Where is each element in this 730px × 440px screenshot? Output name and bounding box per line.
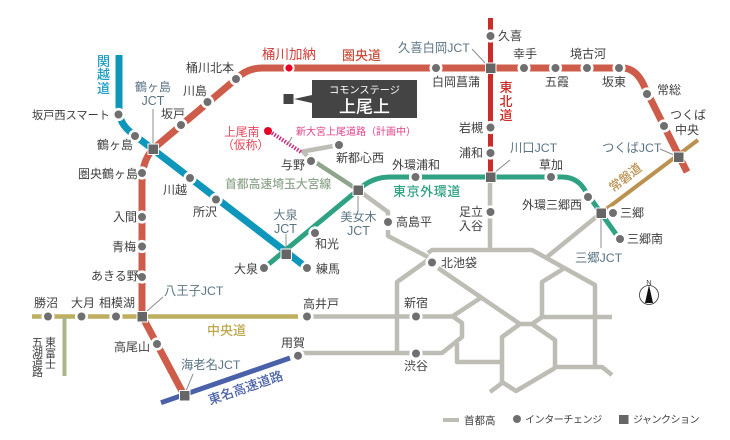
- interchange labels: 浦和: [459, 146, 483, 160]
- junction labels: つくばJCT: [602, 141, 662, 155]
- interchange labels: 久喜: [498, 29, 522, 43]
- interchange labels: 新宿: [404, 296, 428, 310]
- legend: インターチェンジ: [525, 414, 602, 426]
- junction markers: [137, 63, 684, 401]
- interchange labels: 川越: [163, 183, 187, 197]
- station names: highlighted: [222, 47, 416, 152]
- icon: north compass: N: [646, 278, 652, 287]
- interchange labels: 外環浦和: [392, 158, 440, 172]
- line: Kan-Etsu expressway: [119, 55, 307, 268]
- interchange labels: 外環三郷西: [522, 198, 582, 212]
- legend: ジャンクション: [633, 414, 699, 426]
- label: Higashi-Fuji Goko road: 五: [32, 337, 43, 349]
- heading: expressway names: 道: [97, 81, 110, 96]
- label: Higashi-Fuji Goko road: 湖: [32, 346, 43, 359]
- interchange labels: 練馬: [316, 262, 340, 276]
- heading: expressway names: 首都高速埼玉大宮線: [225, 177, 331, 191]
- station names: highlighted: （仮称）: [222, 138, 269, 152]
- callout: Common Stage Ageo-Kami: [284, 80, 417, 118]
- interchange labels: [32, 29, 706, 373]
- heading: expressway names: 北: [500, 94, 513, 109]
- interchange labels: 与野: [281, 158, 305, 172]
- interchange labels: 坂戸: [161, 107, 185, 121]
- interchange labels: 境古河: [570, 46, 606, 61]
- interchange labels: 大月: [71, 296, 95, 310]
- heading: expressway names: 越: [97, 67, 110, 82]
- interchange labels: 入谷: [459, 219, 483, 233]
- icon: north compass: [640, 278, 658, 304]
- heading: expressway names: 常磐道: [606, 160, 645, 195]
- line: Ken-O expressway: [142, 68, 687, 395]
- legend: 首都高: [464, 414, 496, 427]
- junction labels: JCT: [274, 222, 297, 236]
- interchange labels: 渋谷: [404, 359, 428, 373]
- interchange labels: 中央: [675, 122, 699, 137]
- interchange labels: 勝沼: [34, 295, 58, 310]
- station names: highlighted: 新大宮上尾道路（計画中）: [296, 125, 416, 138]
- station names: highlighted: 上尾南: [224, 125, 260, 139]
- interchange labels: 五霞: [545, 75, 569, 89]
- interchange labels: 足立: [459, 205, 483, 219]
- line: Chuo expressway: [32, 314, 298, 319]
- line: Joban expressway: [605, 140, 698, 210]
- junction labels: 美女木: [340, 210, 377, 224]
- callout: Common Stage Ageo-Kami: 上尾上: [339, 98, 390, 116]
- interchange labels: 川島: [183, 83, 207, 98]
- label: Higashi-Fuji Goko road: [32, 336, 56, 379]
- line: Tokyo Gaikan expressway: [264, 177, 618, 268]
- heading: expressway names: 東京外環道: [393, 184, 461, 199]
- line: Tohoku expressway: [488, 18, 493, 177]
- line: Higashi-Fuji Goko road: [62, 317, 66, 376]
- interchange labels: 幸手: [513, 47, 537, 61]
- interchange labels: 和光: [315, 237, 339, 251]
- interchange labels: つくば: [670, 108, 706, 122]
- interchange labels: 坂東: [602, 75, 626, 89]
- label: Higashi-Fuji Goko road: 富: [45, 347, 56, 360]
- label: Higashi-Fuji Goko road: 道: [32, 355, 43, 369]
- interchange labels: 所沢: [193, 205, 217, 219]
- junction labels: 三郷JCT: [575, 251, 623, 265]
- interchange labels: 三郷南: [627, 231, 663, 246]
- interchange labels: 坂戸西スマート: [32, 109, 110, 122]
- interchange labels: 鶴ヶ島: [97, 137, 133, 152]
- leader lines: [146, 49, 674, 391]
- interchange labels: あきる野: [91, 269, 139, 283]
- heading: expressway names: 東名高速道路: [206, 368, 285, 408]
- interchange labels: 高尾山: [114, 340, 150, 354]
- station names: highlighted: 桶川加納: [262, 47, 316, 62]
- heading: expressway names: 圏央道: [342, 48, 381, 63]
- interchange labels: 用賀: [281, 336, 305, 350]
- interchange labels: 岩槻: [459, 120, 483, 135]
- interchange labels: 高井戸: [303, 297, 339, 311]
- heading: expressway names: 東: [500, 80, 513, 95]
- heading: expressway names: 関: [97, 54, 110, 69]
- interchange labels: 北池袋: [441, 256, 477, 270]
- junction labels: 八王子JCT: [164, 284, 224, 298]
- junction labels: 大泉: [273, 208, 298, 222]
- heading: expressway names: 中央道: [207, 323, 246, 338]
- interchange markers: [43, 31, 669, 361]
- legend: [443, 414, 699, 427]
- heading: expressway names: 道: [500, 108, 513, 123]
- interchange labels: 高島平: [396, 214, 432, 229]
- heading: expressway names: [97, 48, 645, 408]
- label: Higashi-Fuji Goko road: 士: [45, 358, 56, 371]
- interchange labels: 三郷: [620, 206, 644, 220]
- line: Saitama Omiya route: [309, 158, 358, 190]
- label: Higashi-Fuji Goko road: 東: [45, 336, 56, 349]
- junction labels: 鶴ヶ島: [135, 79, 171, 94]
- metropolitan expressway network: [295, 145, 612, 392]
- marker: Ageo-Minami station: [264, 127, 272, 135]
- interchange labels: 常総: [657, 82, 681, 97]
- junction labels: JCT: [347, 224, 370, 238]
- interchange labels: 草加: [539, 158, 563, 172]
- interchange labels: 白岡菖蒲: [432, 74, 480, 89]
- junction labels: [135, 40, 662, 372]
- junction labels: JCT: [142, 94, 165, 108]
- line: Tomei expressway: [161, 358, 290, 403]
- junction labels: 海老名JCT: [181, 357, 241, 372]
- interchange labels: 相模湖: [99, 295, 135, 310]
- interchange labels: 圏央鶴ヶ島: [78, 166, 138, 181]
- line: planned Shin-Omiya Ageo road: [272, 133, 301, 152]
- interchange labels: 入間: [113, 210, 137, 224]
- marker: Okegawa-Kano station: [284, 63, 294, 73]
- interchange labels: 桶川北本: [186, 60, 234, 75]
- label: Higashi-Fuji Goko road: 路: [32, 366, 43, 379]
- callout: Common Stage Ageo-Kami: コモンステージ: [329, 86, 400, 96]
- interchange labels: 新都心西: [336, 151, 384, 165]
- junction labels: 川口JCT: [510, 141, 558, 155]
- junction labels: 久喜白岡JCT: [398, 40, 470, 55]
- interchange labels: 大泉: [234, 262, 258, 276]
- interchange labels: 青梅: [112, 240, 136, 254]
